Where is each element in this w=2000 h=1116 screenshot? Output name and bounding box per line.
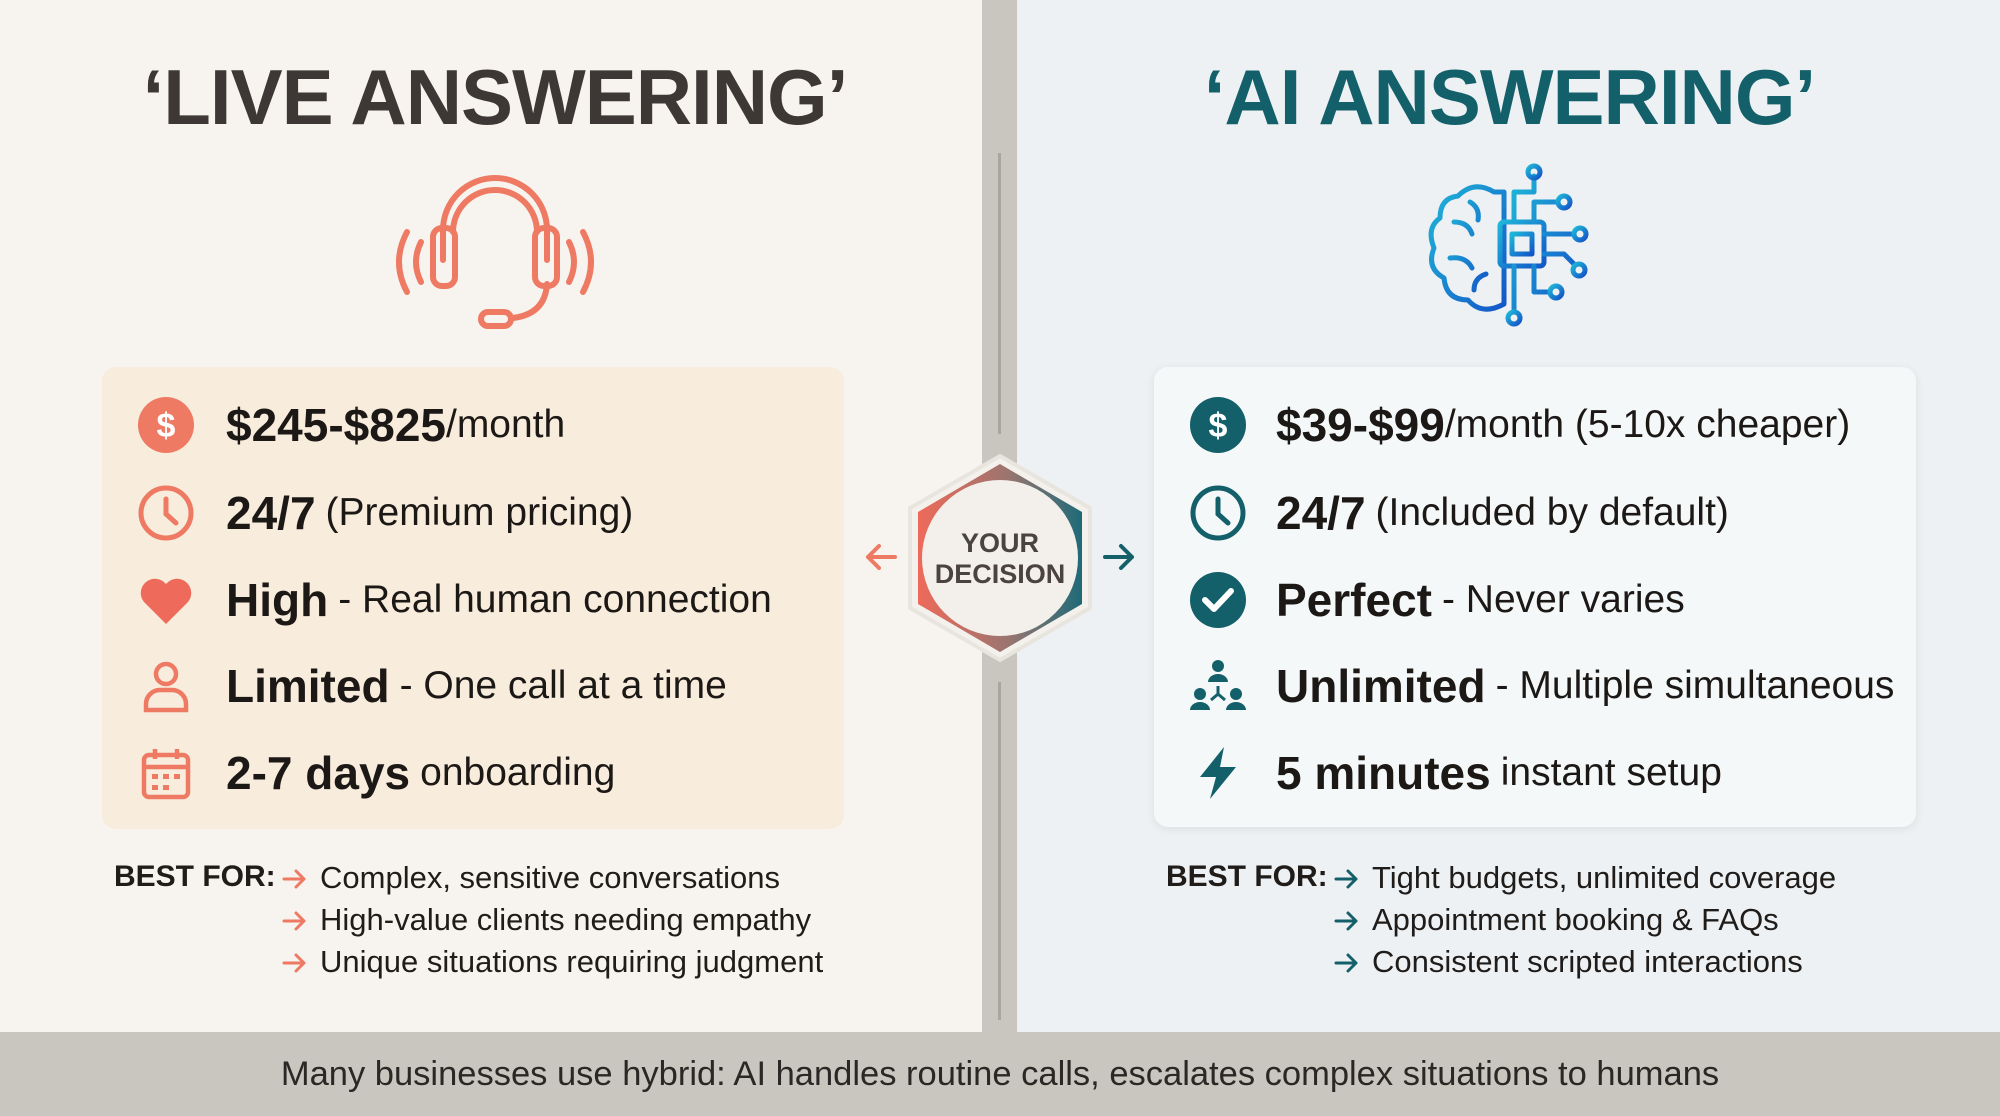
panel: live answering background xyxy=(0,0,982,1032)
row: availability: 24/7 xyxy=(226,487,316,539)
decision hexagon xyxy=(908,454,1092,662)
panel: live answering card xyxy=(102,367,844,829)
best for: live: High-value clients needing empathy xyxy=(320,902,811,937)
row: price: $245-$825 xyxy=(226,399,446,451)
footer bar: Many businesses use hybrid: AI handles routine calls, escalates complex situations to humans xyxy=(281,1055,1719,1093)
row: consistency: Perfect xyxy=(1276,574,1432,626)
row: setup: 5 minutes xyxy=(1276,747,1491,799)
row: availability xyxy=(1190,486,1729,540)
icon: headset xyxy=(396,175,594,329)
row: availability xyxy=(138,486,633,540)
row: price xyxy=(1190,397,1850,453)
decision hexagon: YOUR xyxy=(961,528,1039,558)
best for: live: Complex, sensitive conversations xyxy=(320,860,780,895)
row: availability: (Included by default) xyxy=(1376,491,1729,534)
icon: check xyxy=(1190,572,1246,628)
best for: live: Unique situations requiring judgment xyxy=(320,944,823,979)
row: capacity xyxy=(144,660,727,712)
row: capacity: - One call at a time xyxy=(400,664,727,707)
icon: clock xyxy=(138,486,194,540)
row: onboarding: onboarding xyxy=(420,751,615,794)
icon: person xyxy=(144,662,188,712)
row: quality: - Real human connection xyxy=(338,578,772,621)
icon: ai brain chip xyxy=(1428,164,1588,326)
row: capacity: Limited xyxy=(226,660,390,712)
arrow: right xyxy=(1103,544,1134,570)
icon: heart xyxy=(140,578,192,624)
icon: lightning xyxy=(1200,747,1236,799)
row: capacity: - Multiple simultaneous xyxy=(1496,664,1894,707)
row: onboarding xyxy=(142,747,615,800)
row: quality: High xyxy=(226,574,328,626)
row: price: $39-$99 xyxy=(1276,399,1445,451)
title: ai answering: ‘AI ANSWERING’ xyxy=(1204,53,1815,141)
best for: ai: BEST FOR: xyxy=(1166,860,1328,893)
panel: ai answering background xyxy=(1017,0,2000,1032)
row: consistency: - Never varies xyxy=(1442,578,1685,621)
row: price: /month (5-10x cheaper) xyxy=(1445,403,1850,446)
icon: dollar: $ xyxy=(157,407,176,445)
row: setup xyxy=(1200,747,1722,799)
best for: live: BEST FOR: xyxy=(114,860,276,893)
row: quality xyxy=(140,574,772,626)
footer bar xyxy=(0,1032,2000,1116)
arrow: left xyxy=(866,544,897,570)
row: availability: 24/7 xyxy=(1276,487,1366,539)
center divider xyxy=(982,0,1017,1032)
icon: clock xyxy=(1190,486,1246,540)
row: price: /month xyxy=(446,403,565,446)
decision hexagon: DECISION xyxy=(935,559,1065,589)
icon: dollar xyxy=(1190,397,1246,453)
icon: dollar xyxy=(138,397,194,453)
panel: ai answering card xyxy=(1154,367,1916,827)
best for: ai: Tight budgets, unlimited coverage xyxy=(1372,860,1836,895)
row: setup: instant setup xyxy=(1501,751,1722,794)
title: live answering: ‘LIVE ANSWERING’ xyxy=(143,53,847,141)
icon: dollar: $ xyxy=(1209,407,1228,445)
best for: ai: Appointment booking & FAQs xyxy=(1372,902,1779,937)
icon: people network xyxy=(1190,660,1246,710)
row: capacity: Unlimited xyxy=(1276,660,1486,712)
row: consistency xyxy=(1190,572,1685,628)
best for: ai: Consistent scripted interactions xyxy=(1372,944,1803,979)
icon: calendar xyxy=(142,749,190,800)
best for: live xyxy=(114,860,823,979)
row: onboarding: 2-7 days xyxy=(226,747,410,799)
row: capacity xyxy=(1190,660,1894,712)
row: price xyxy=(138,397,565,453)
row: availability: (Premium pricing) xyxy=(326,491,633,534)
best for: ai xyxy=(1166,860,1836,979)
